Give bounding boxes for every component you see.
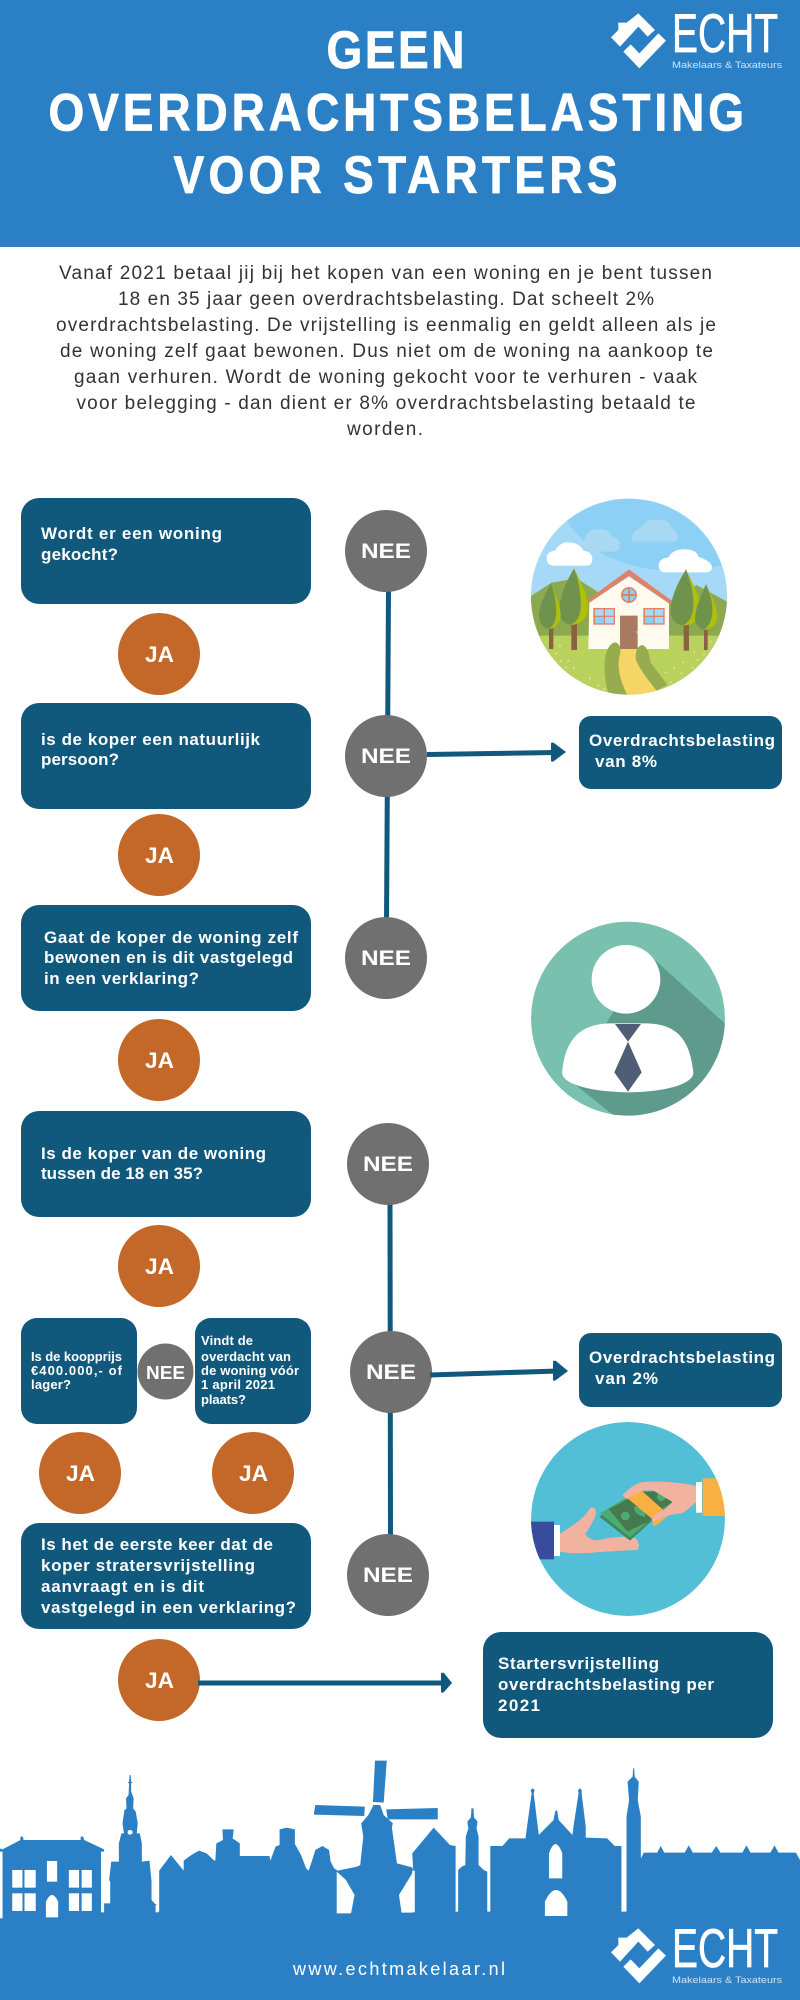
JA 2: JA: [145, 843, 174, 868]
question 3: bewonen en is dit vastgelegd: [44, 948, 293, 967]
NEE 6: NEE: [363, 1564, 413, 1587]
result: 8%: [579, 716, 782, 789]
question 5a: koopprijs: €400.000,- of: [31, 1363, 123, 1378]
question 5b: overdracht datum: de woning vóór: [201, 1363, 299, 1378]
intro text: worden.: [346, 419, 423, 440]
JA 3: [118, 1019, 200, 1101]
arrow: NEE 5 to 2%: [430, 1361, 568, 1381]
NEE 3: [345, 917, 427, 999]
result: 8%: Overdrachtsbelasting: [589, 731, 775, 750]
question 6: koper stratersvrijstelling: [41, 1556, 255, 1575]
result: 2%: [579, 1333, 782, 1407]
JA 4: JA: [145, 1254, 174, 1279]
question 3: in een verklaring?: [44, 969, 199, 988]
question 4: [21, 1111, 311, 1217]
result: startersvrijstelling: overdrachtsbelasting per: [498, 1675, 714, 1694]
JA 5a: [39, 1432, 121, 1514]
JA 5b: JA: [239, 1461, 268, 1486]
intro text: Vanaf 2021 betaal jij bij het kopen van een woning en je bent tussen: [59, 263, 712, 284]
JA 3: JA: [145, 1048, 174, 1073]
question 6: aanvraagt en is dit: [41, 1577, 204, 1596]
result: startersvrijstelling: Startersvrijstelling: [498, 1654, 659, 1673]
question 2: is de koper een natuurlijk: [41, 730, 261, 749]
result: 2%: van 2%: [595, 1369, 658, 1388]
header band: [0, 0, 800, 247]
NEE 6: [347, 1534, 429, 1616]
question 6: Is het de eerste keer dat de: [41, 1535, 273, 1554]
title: GEEN: [326, 20, 464, 80]
intro text: voor belegging - dan dient er 8% overdrachtsbelasting betaald te: [76, 393, 696, 414]
intro text: [56, 263, 716, 440]
result: 2%: Overdrachtsbelasting: [589, 1348, 775, 1367]
question 5b: overdracht datum: 1 april 2021: [201, 1377, 275, 1392]
website url: www.echtmakelaar.nl: [292, 1959, 505, 1979]
question 5b: overdracht datum: plaats?: [201, 1392, 246, 1407]
JA 2: [118, 814, 200, 896]
intro text: overdrachtsbelasting. De vrijstelling is eenmalig en geldt alleen als je: [56, 315, 716, 336]
question 5a: koopprijs: Is de koopprijs: [31, 1349, 122, 1364]
question 1: gekocht?: [41, 545, 118, 564]
question 6: vastgelegd in een verklaring?: [41, 1598, 296, 1617]
JA 4: [118, 1225, 200, 1307]
question 5a: koopprijs: lager?: [31, 1377, 71, 1392]
title: [48, 20, 744, 205]
question 5a: koopprijs: [21, 1318, 137, 1424]
NEE 4: NEE: [363, 1153, 413, 1176]
result: 8%: van 8%: [595, 752, 657, 771]
skyline footer: [0, 1761, 800, 2000]
NEE 5: NEE: [366, 1361, 416, 1384]
title: VOOR STARTERS: [174, 145, 618, 205]
intro text: de woning zelf gaat bewonen. Dus niet om de woning na aankoop te: [60, 341, 713, 362]
title: OVERDRACHTSBELASTING: [48, 83, 744, 142]
question 1: [21, 498, 311, 604]
question 2: persoon?: [41, 750, 119, 769]
JA 5a: JA: [66, 1461, 95, 1486]
NEE 1: [345, 510, 427, 592]
arrow: JA 6 to startersvrijstelling: [198, 1673, 452, 1693]
question 1: Wordt er een woning: [41, 524, 222, 543]
intro text: gaan verhuren. Wordt de woning gekocht voor te verhuren - vaak: [74, 367, 698, 388]
NEE 3: NEE: [361, 947, 411, 970]
question 4: Is de koper van de woning: [41, 1144, 266, 1163]
arrow: NEE 2 to 8%: [427, 742, 566, 762]
JA 1: JA: [145, 642, 174, 667]
question 4: tussen de 18 en 35?: [41, 1164, 203, 1183]
small NEE: [138, 1344, 194, 1400]
NEE 5: [350, 1331, 432, 1413]
question 5b: overdracht datum: overdacht van: [201, 1349, 291, 1364]
city silhouette: [0, 1761, 800, 2000]
NEE 1: NEE: [361, 540, 411, 563]
connector line: lower NEE trunk: [388, 1200, 393, 1545]
question 6: [21, 1523, 311, 1629]
logo: ECHT bottom: Makelaars & Taxateurs: [672, 1975, 782, 1986]
NEE 4: [347, 1123, 429, 1205]
logo: ECHT bottom: [611, 1917, 782, 1986]
connector line: upper NEE trunk: [386, 590, 388, 925]
logo: ECHT top: Makelaars & Taxateurs: [672, 60, 782, 71]
question 3: [21, 905, 311, 1011]
JA 1: [118, 613, 200, 695]
question 3: Gaat de koper de woning zelf: [44, 928, 298, 947]
logo: ECHT top: [611, 2, 782, 71]
icon: person with tie: [531, 922, 728, 1120]
icon: house illustration: [530, 497, 730, 700]
result: startersvrijstelling: [483, 1632, 773, 1738]
question 5b: overdracht datum: [195, 1318, 311, 1424]
intro text: 18 en 35 jaar geen overdrachtsbelasting. Dat scheelt 2%: [118, 289, 654, 310]
JA 5b: [212, 1432, 294, 1514]
question 2: [21, 703, 311, 809]
NEE 2: [345, 715, 427, 797]
question 5b: overdracht datum: Vindt de: [201, 1333, 253, 1348]
JA 6: [118, 1639, 200, 1721]
small NEE: NEE: [146, 1363, 185, 1383]
result: startersvrijstelling: 2021: [498, 1696, 540, 1715]
JA 6: JA: [145, 1668, 174, 1693]
icon: money exchange: [530, 1422, 726, 1616]
NEE 2: NEE: [361, 745, 411, 768]
